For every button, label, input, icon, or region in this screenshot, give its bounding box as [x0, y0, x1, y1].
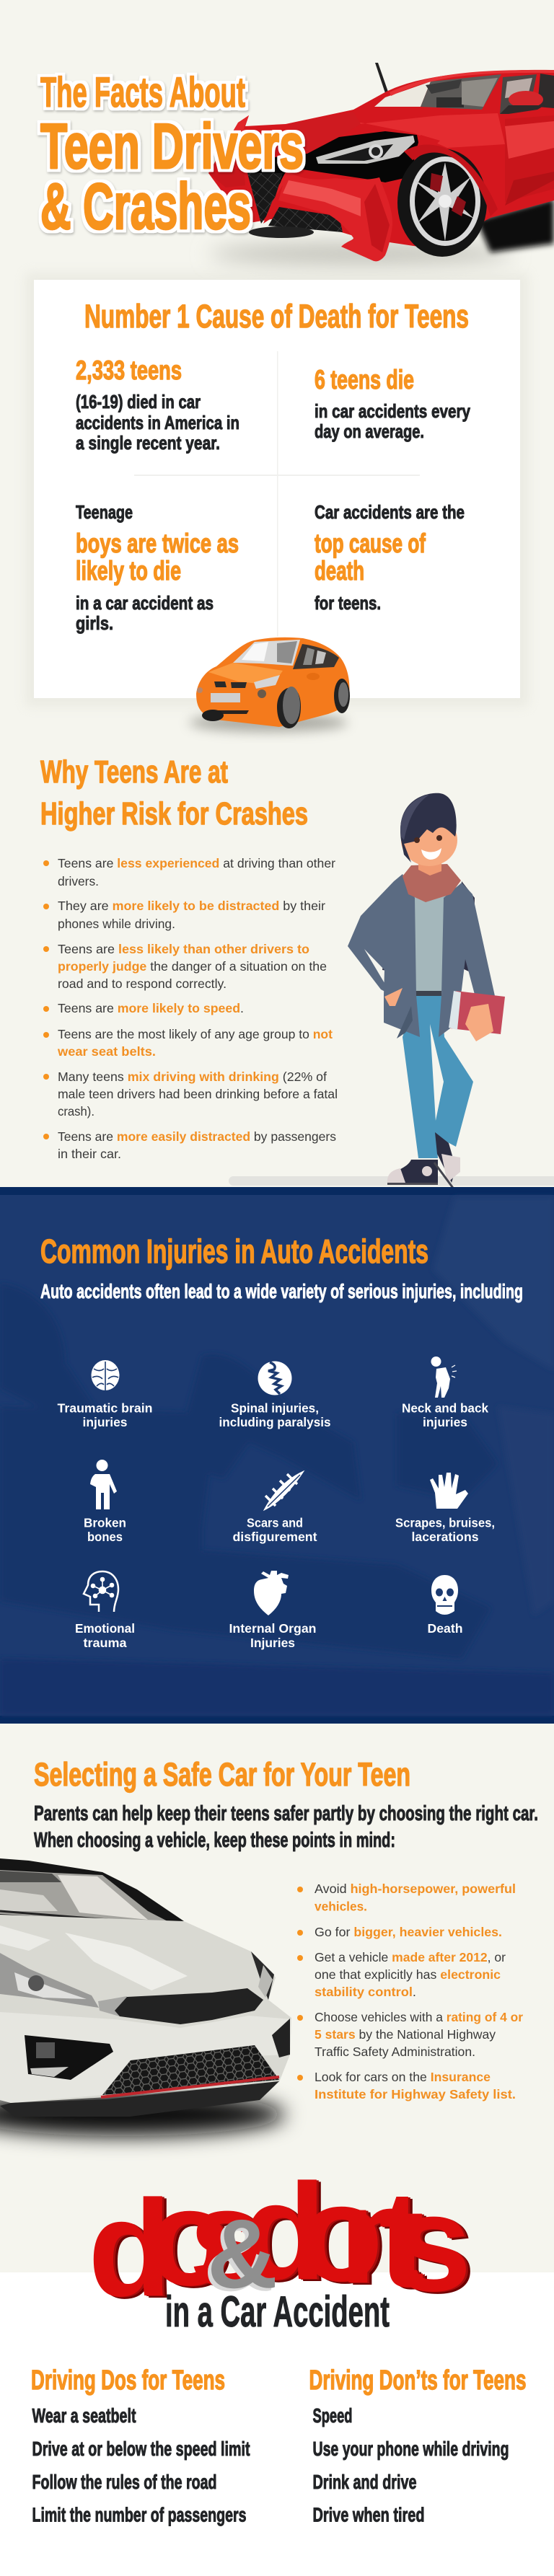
item: internal organ injuries: Internal Organ — [229, 1621, 316, 1636]
stat: boys twice as likely: boys are twice as — [76, 529, 239, 558]
item: neck and back injuries: injuries — [423, 1415, 467, 1429]
list: driving dos — [31, 2365, 250, 2526]
item: scars and disfigurement — [232, 1471, 317, 1544]
stat: 6 teens die: 6 teens die — [315, 365, 414, 394]
stat: 2,333 teens: (16-19) died in car — [76, 391, 201, 413]
list: driving donts: Drink and drive — [313, 2471, 417, 2493]
bullet list: choosing a vehicle: Get a vehicle made after 2012, or — [315, 1950, 506, 1964]
stat: top cause of death: for teens. — [315, 592, 381, 614]
shoes — [389, 1160, 438, 1183]
heading: why teens are at higher risk — [40, 754, 308, 832]
bullet list: choosing a vehicle: Choose vehicles with a rating of 4 or — [315, 2010, 523, 2024]
stat: 2,333 teens: accidents in America in — [76, 412, 239, 433]
bullet list: risk reasons: drivers. — [58, 874, 99, 888]
item: emotional trauma: trauma — [84, 1636, 127, 1650]
bullet list: risk reasons: wear seat belts. — [57, 1044, 156, 1059]
title: Teen Drivers — [40, 110, 304, 182]
list: driving dos: Limit the number of passengers — [32, 2504, 247, 2526]
head and hair — [401, 814, 457, 866]
list: driving donts: Drive when tired — [313, 2504, 424, 2526]
icon: brain — [91, 1360, 120, 1390]
item: scars and disfigurement: disfigurement — [232, 1530, 317, 1544]
item: neck and back injuries — [402, 1357, 488, 1429]
item: emotional trauma — [75, 1571, 135, 1650]
bullet list: choosing a vehicle: stability control . — [315, 1985, 416, 1999]
book — [450, 991, 505, 1034]
item: traumatic brain injuries: Traumatic brain — [58, 1401, 153, 1415]
graphic: dos & donts 3D lettering — [88, 2156, 472, 2325]
list: driving donts — [309, 2365, 527, 2526]
bullet list: risk reasons — [43, 856, 338, 1161]
item: traumatic brain injuries — [58, 1360, 153, 1429]
list: driving donts: Speed — [313, 2404, 352, 2427]
bullet list: risk reasons: Many teens mix driving with drinking (22% of — [58, 1069, 327, 1084]
item: spinal injuries: including paralysis — [219, 1415, 331, 1429]
image: white car front — [0, 1858, 291, 2136]
heading: why teens are at higher risk: Higher Risk for Crashes — [40, 796, 308, 832]
bullet list: choosing a vehicle: Traffic Safety Administration. — [315, 2045, 475, 2059]
illustration: teen with backpack and book — [229, 793, 554, 1190]
neck — [418, 858, 441, 875]
jeans — [403, 995, 473, 1158]
item: neck and back injuries: Neck and back — [402, 1401, 488, 1415]
item: scrapes, bruises, lacerations: lacerations — [411, 1530, 479, 1544]
hands — [465, 1004, 493, 1041]
item: internal organ injuries: Injuries — [250, 1636, 295, 1650]
graphic: dos & donts 3D lettering: & — [207, 2199, 278, 2308]
bullet list: choosing a vehicle: 5 stars by the National Highway — [315, 2027, 496, 2042]
bullet list: risk reasons: road and to respond correctly. — [58, 976, 227, 991]
stat: 2,333 teens: 2,333 teens — [76, 356, 182, 385]
item: broken bones: Broken — [84, 1516, 126, 1530]
item: spinal injuries: Spinal injuries, — [231, 1401, 319, 1415]
item: emotional trauma: Emotional — [75, 1621, 135, 1636]
bullet list: risk reasons: crash). — [58, 1104, 94, 1119]
bullet list: risk reasons: properly judge the danger of a situation on the — [58, 959, 327, 974]
item: traumatic brain injuries: injuries — [82, 1415, 128, 1429]
stat: top cause of death: Car accidents are the — [315, 501, 465, 523]
stat: boys twice as likely: Teenage — [76, 501, 133, 523]
bullet list: risk reasons: Teens are more easily distracted by passengers — [58, 1129, 336, 1144]
bullet list: risk reasons: phones while driving. — [58, 917, 175, 931]
stat: top cause of death: top cause of — [315, 529, 426, 558]
bullet list: choosing a vehicle: Go for bigger, heavier vehicles. — [315, 1925, 502, 1939]
item: scrapes, bruises, lacerations — [395, 1473, 495, 1544]
icon: skull — [431, 1575, 458, 1615]
graphic: dos & donts 3D lettering: donts — [242, 2156, 472, 2320]
stat: boys twice as likely: girls. — [76, 612, 113, 634]
title — [40, 69, 304, 243]
backpack straps — [382, 874, 475, 974]
icon: orange car — [189, 638, 350, 732]
stat: top cause of death — [315, 501, 465, 614]
item: spinal injuries — [219, 1362, 331, 1429]
stat: boys twice as likely: in a car accident as — [76, 592, 214, 614]
bullet list: risk reasons: Teens are more likely to speed. — [58, 1001, 244, 1015]
bullet list: risk reasons: male teen drivers had been drinking before a fatal — [58, 1087, 338, 1101]
background photo: injured person — [0, 1197, 554, 1716]
stat: boys twice as likely — [76, 501, 239, 634]
list: driving dos: Follow the rules of the road — [32, 2471, 216, 2493]
intro text: parents can help: When choosing a vehicle, keep these points in mind: — [34, 1829, 395, 1852]
item: death: Death — [427, 1621, 463, 1636]
title: The Facts About — [40, 69, 245, 116]
t-shirt — [409, 894, 447, 992]
item: death — [427, 1575, 463, 1636]
item: broken bones — [84, 1460, 126, 1544]
scarf — [403, 864, 461, 902]
item: internal organ injuries — [229, 1571, 316, 1650]
item: scars and disfigurement: Scars and — [247, 1516, 303, 1530]
intro text: parents can help — [34, 1802, 538, 1852]
stat: 6 teens die: in car accidents every — [315, 400, 470, 422]
item: broken bones: bones — [87, 1530, 123, 1544]
stat: 2,333 teens — [76, 356, 239, 454]
item: scrapes, bruises, lacerations: Scrapes, bruises, — [395, 1516, 495, 1530]
bullet list: choosing a vehicle: Look for cars on the Insurance — [315, 2070, 491, 2084]
stat: boys twice as likely: likely to die — [76, 556, 181, 586]
list: driving dos: Drive at or below the speed limit — [32, 2438, 250, 2460]
bullet list: risk reasons: Teens are less likely than other drivers to — [58, 942, 309, 956]
icon: person with arm sling — [90, 1460, 117, 1509]
bullet list: choosing a vehicle — [297, 1882, 523, 2101]
panel: dos and donts background — [0, 2272, 554, 2576]
bullet list: risk reasons: They are more likely to be distracted by their — [58, 899, 325, 913]
heading: in a car accident: in a Car Accident — [165, 2288, 390, 2336]
heading: why teens are at higher risk: Why Teens Are at — [40, 754, 228, 790]
bullet list: choosing a vehicle: Avoid high-horsepower, powerful — [315, 1882, 516, 1896]
coat — [348, 874, 420, 1037]
heading: selecting a safe car: Selecting a Safe Car for Your Teen — [34, 1756, 410, 1793]
bullet list: choosing a vehicle: one that explicitly has electronic — [315, 1967, 501, 1982]
bullet list: risk reasons: Teens are the most likely of any age group to not — [58, 1027, 333, 1041]
icon: spine — [258, 1362, 291, 1395]
panel: common injuries — [0, 1187, 554, 1724]
stat: 6 teens die: day on average. — [315, 420, 424, 442]
list: driving dos: Driving Dos for Teens — [31, 2365, 225, 2396]
icon: anatomical heart — [254, 1571, 289, 1615]
icon: head with network — [84, 1571, 118, 1612]
bullet list: risk reasons: in their car. — [58, 1147, 121, 1161]
panel: number 1 cause of death — [25, 273, 529, 707]
icon: stitched scar — [264, 1471, 304, 1510]
bullet list: choosing a vehicle: Institute for Highway Safety list. — [315, 2087, 516, 2101]
stat: 6 teens die — [315, 365, 470, 442]
bullet list: risk reasons: Teens are less experienced at driving than other — [58, 856, 335, 870]
stat: 2,333 teens: a single recent year. — [76, 432, 220, 454]
icon: bandaged hand — [430, 1473, 468, 1509]
title: & Crashes — [40, 171, 251, 243]
icon: person holding back — [431, 1357, 457, 1398]
bullet list: choosing a vehicle: vehicles. — [315, 1900, 367, 1914]
list: driving dos: Wear a seatbelt — [32, 2404, 136, 2427]
stat: top cause of death: death — [315, 556, 364, 586]
hero image: crashed red car — [208, 63, 554, 265]
graphic: dos & donts 3D lettering: dos — [88, 2161, 265, 2325]
